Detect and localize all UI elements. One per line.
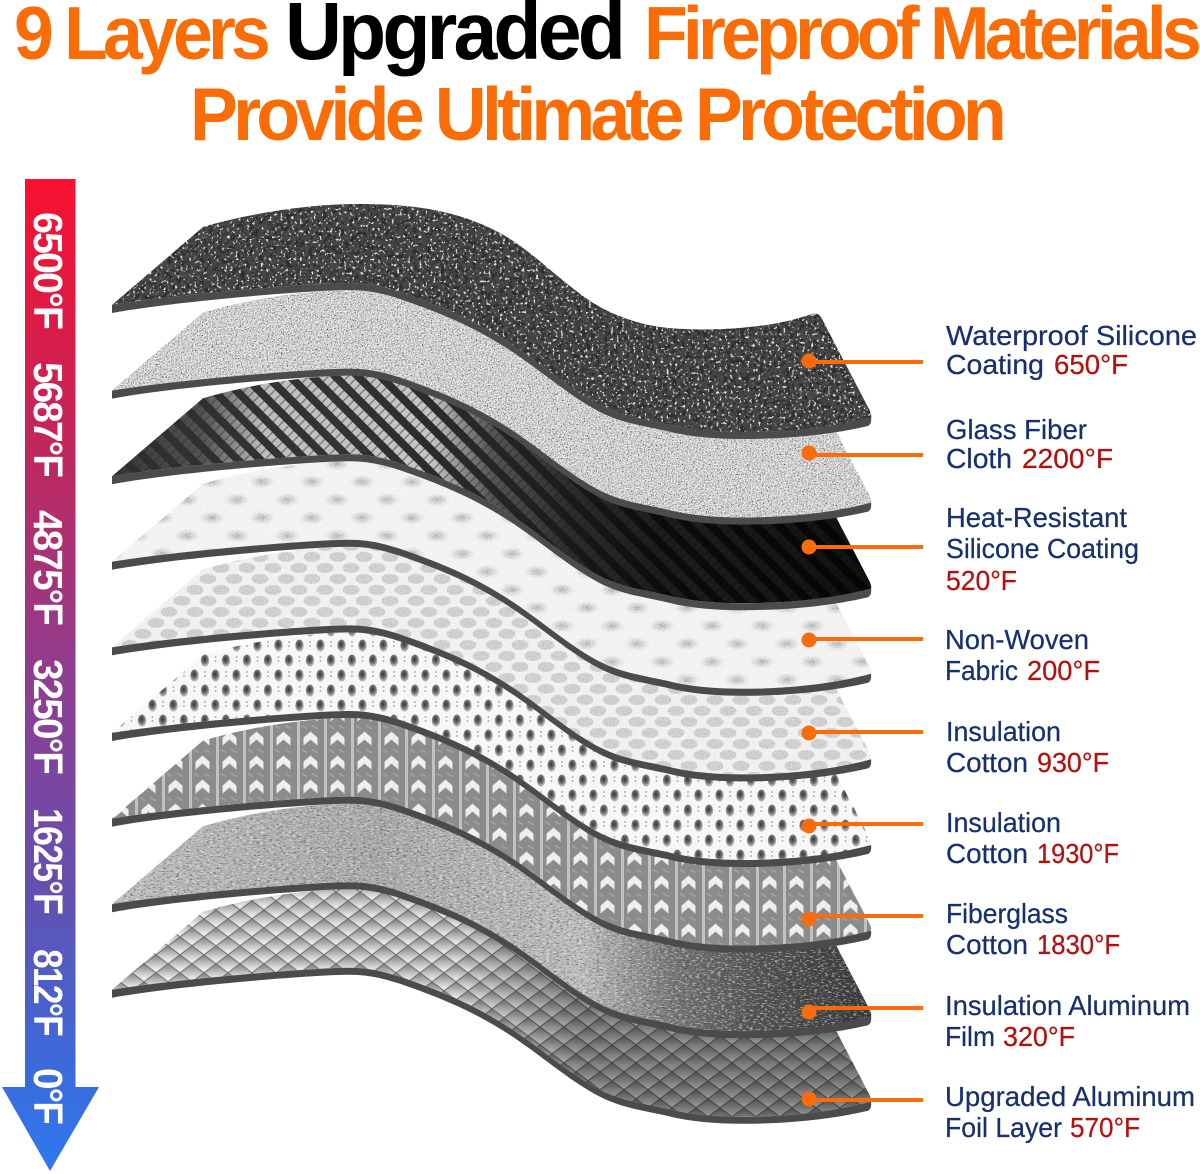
- label: waterproof silicone coating: 650°F: [1054, 349, 1128, 380]
- label: insulation cotton 930: [946, 716, 1109, 778]
- label: insulation aluminum film: Insulation Aluminum: [945, 990, 1190, 1021]
- layer 6: insulation cotton mesh: [112, 632, 872, 867]
- label: upgraded aluminum foil layer: [945, 1081, 1195, 1143]
- label: insulation aluminum film: 320°F: [1003, 1021, 1075, 1052]
- layer 2: glass fiber cloth: [112, 290, 872, 525]
- layer 8: insulation aluminum film: [112, 804, 872, 1038]
- label: glass fiber cloth: 2200°F: [1022, 443, 1113, 474]
- layer 7: fiberglass cotton: [112, 718, 872, 953]
- label: glass fiber cloth: Cloth: [946, 443, 1012, 474]
- temperature scale labels: 3250°F: [25, 659, 71, 774]
- callout leader lines: [802, 354, 923, 1106]
- layer 9: upgraded aluminum foil: [112, 889, 872, 1124]
- label: insulation cotton 1930: [946, 807, 1119, 869]
- layer 3: heat-resistant silicone carbon coating: [112, 376, 872, 610]
- temperature scale labels: 0°F: [25, 1068, 71, 1124]
- label: fiberglass cotton: Cotton: [946, 929, 1028, 960]
- temperature gradient arrow: [2, 179, 99, 1171]
- leader 9: [802, 1092, 923, 1106]
- label: non-woven fabric: Non-Woven: [945, 624, 1089, 655]
- leader 4: [802, 632, 923, 648]
- label: waterproof silicone coating: [946, 320, 1197, 380]
- label: waterproof silicone coating: Waterproof Silicone: [946, 320, 1197, 351]
- temperature scale labels: 4875°F: [25, 510, 71, 625]
- label: fiberglass cotton: Fiberglass: [946, 898, 1068, 929]
- leader 8: [802, 1004, 923, 1020]
- layer stack: [100, 190, 890, 1135]
- label: heat-resistant silicone coating: Heat-Resistant: [946, 502, 1127, 533]
- label: heat-resistant silicone coating: 520°F: [946, 565, 1017, 596]
- label: insulation cotton 1930: Cotton: [946, 838, 1028, 869]
- leader 7: [802, 912, 923, 926]
- temperature scale labels: 6500°F: [25, 212, 71, 329]
- temperature scale labels: 812°F: [25, 949, 71, 1036]
- temperature scale labels: [25, 212, 71, 1124]
- leader 6: [802, 818, 923, 834]
- label: glass fiber cloth: Glass Fiber: [946, 414, 1087, 445]
- label: heat-resistant silicone coating: [946, 502, 1139, 596]
- label: non-woven fabric: [945, 624, 1100, 686]
- label: insulation aluminum film: Film: [945, 1021, 995, 1052]
- label: insulation cotton 930: 930°F: [1037, 747, 1109, 778]
- label: insulation cotton 930: Cotton: [946, 747, 1028, 778]
- temperature scale labels: 5687°F: [25, 362, 71, 477]
- leader 3: [802, 540, 923, 554]
- arrow shape: [2, 179, 99, 1171]
- label: upgraded aluminum foil layer: 570°F: [1070, 1112, 1140, 1143]
- label: waterproof silicone coating: Coating: [946, 349, 1044, 380]
- layer 5: insulation cotton honeycomb: [112, 546, 872, 782]
- leader 5: [802, 726, 923, 740]
- layer 4: non-woven fabric: [112, 461, 872, 696]
- layer 1: waterproof silicone coating: [112, 204, 872, 439]
- title: Provide Ultimate Protection: [190, 72, 1003, 156]
- temperature scale labels: 1625°F: [25, 808, 71, 914]
- label: heat-resistant silicone coating: Silicone Coating: [946, 533, 1139, 564]
- label: upgraded aluminum foil layer: Upgraded Aluminum: [945, 1081, 1195, 1112]
- label: fiberglass cotton: [946, 898, 1120, 960]
- label: non-woven fabric: 200°F: [1027, 655, 1100, 686]
- label: upgraded aluminum foil layer: Foil Layer: [945, 1112, 1062, 1143]
- leader 1: [802, 354, 923, 368]
- label: insulation cotton 1930: Insulation: [946, 807, 1061, 838]
- label: insulation cotton 930: Insulation: [946, 716, 1061, 747]
- label: fiberglass cotton: 1830°F: [1037, 929, 1120, 960]
- title: [14, 0, 1199, 156]
- label: insulation cotton 1930: 1930°F: [1037, 838, 1119, 869]
- label: insulation aluminum film: [945, 990, 1190, 1052]
- leader 2: [802, 446, 923, 460]
- label: glass fiber cloth: [946, 414, 1113, 474]
- label: non-woven fabric: Fabric: [945, 655, 1018, 686]
